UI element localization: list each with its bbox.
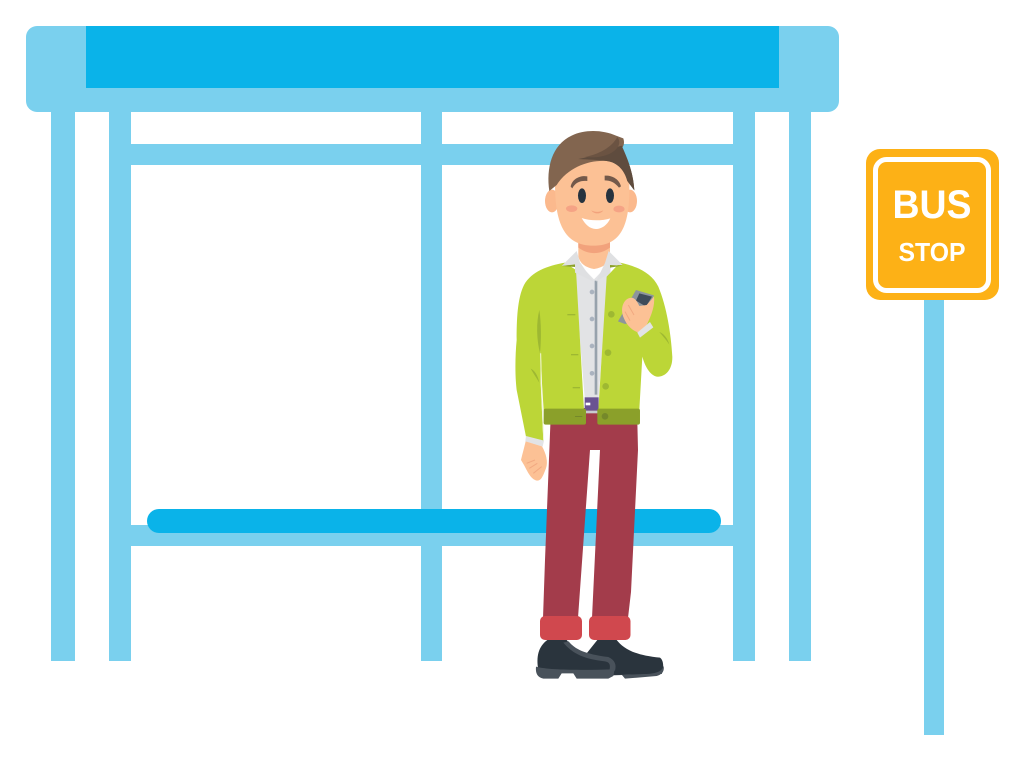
bus shelter bbox=[26, 26, 839, 661]
shelter posts bbox=[51, 100, 811, 661]
jacket buttons bbox=[602, 311, 615, 390]
collar and lapels bbox=[562, 251, 623, 282]
face bbox=[555, 158, 629, 246]
right shoe bbox=[587, 640, 663, 675]
nose bbox=[591, 210, 603, 213]
undershirt bbox=[581, 263, 606, 279]
sign inner border bbox=[876, 160, 988, 290]
jacket bbox=[515, 263, 584, 441]
neck and head bbox=[545, 131, 637, 282]
neck bbox=[578, 238, 610, 269]
trouser cuffs bbox=[540, 616, 630, 640]
man standing with phone bbox=[515, 131, 672, 679]
sign text: BUS: BUS bbox=[892, 183, 972, 227]
left cuff and fist bbox=[521, 436, 547, 481]
jacket hem bbox=[544, 409, 640, 425]
shirt bbox=[575, 263, 612, 397]
sleeve gap bbox=[541, 353, 544, 439]
eyebrows bbox=[571, 176, 621, 188]
belt bbox=[585, 397, 599, 411]
shelter roof bbox=[26, 26, 839, 112]
bus stop sign bbox=[866, 149, 999, 735]
left shoe bbox=[537, 640, 614, 672]
trousers bbox=[543, 408, 638, 618]
shirt placket and buttons bbox=[590, 281, 597, 395]
roof panel bbox=[86, 26, 779, 88]
cheeks bbox=[566, 205, 625, 212]
body, jacket and arms bbox=[515, 263, 672, 481]
collar shadows bbox=[562, 264, 623, 268]
eyes bbox=[578, 188, 614, 203]
sign board bbox=[866, 149, 999, 300]
sign pole bbox=[924, 298, 944, 735]
bench bbox=[147, 509, 721, 533]
jacket fold shadows bbox=[531, 310, 669, 388]
smile bbox=[582, 218, 610, 229]
sign text: STOP: STOP bbox=[898, 237, 966, 267]
phone hand and cuff bbox=[622, 297, 654, 338]
phone bbox=[618, 290, 654, 324]
shoes bbox=[536, 640, 664, 679]
hair bbox=[548, 131, 634, 191]
ears bbox=[545, 190, 637, 212]
